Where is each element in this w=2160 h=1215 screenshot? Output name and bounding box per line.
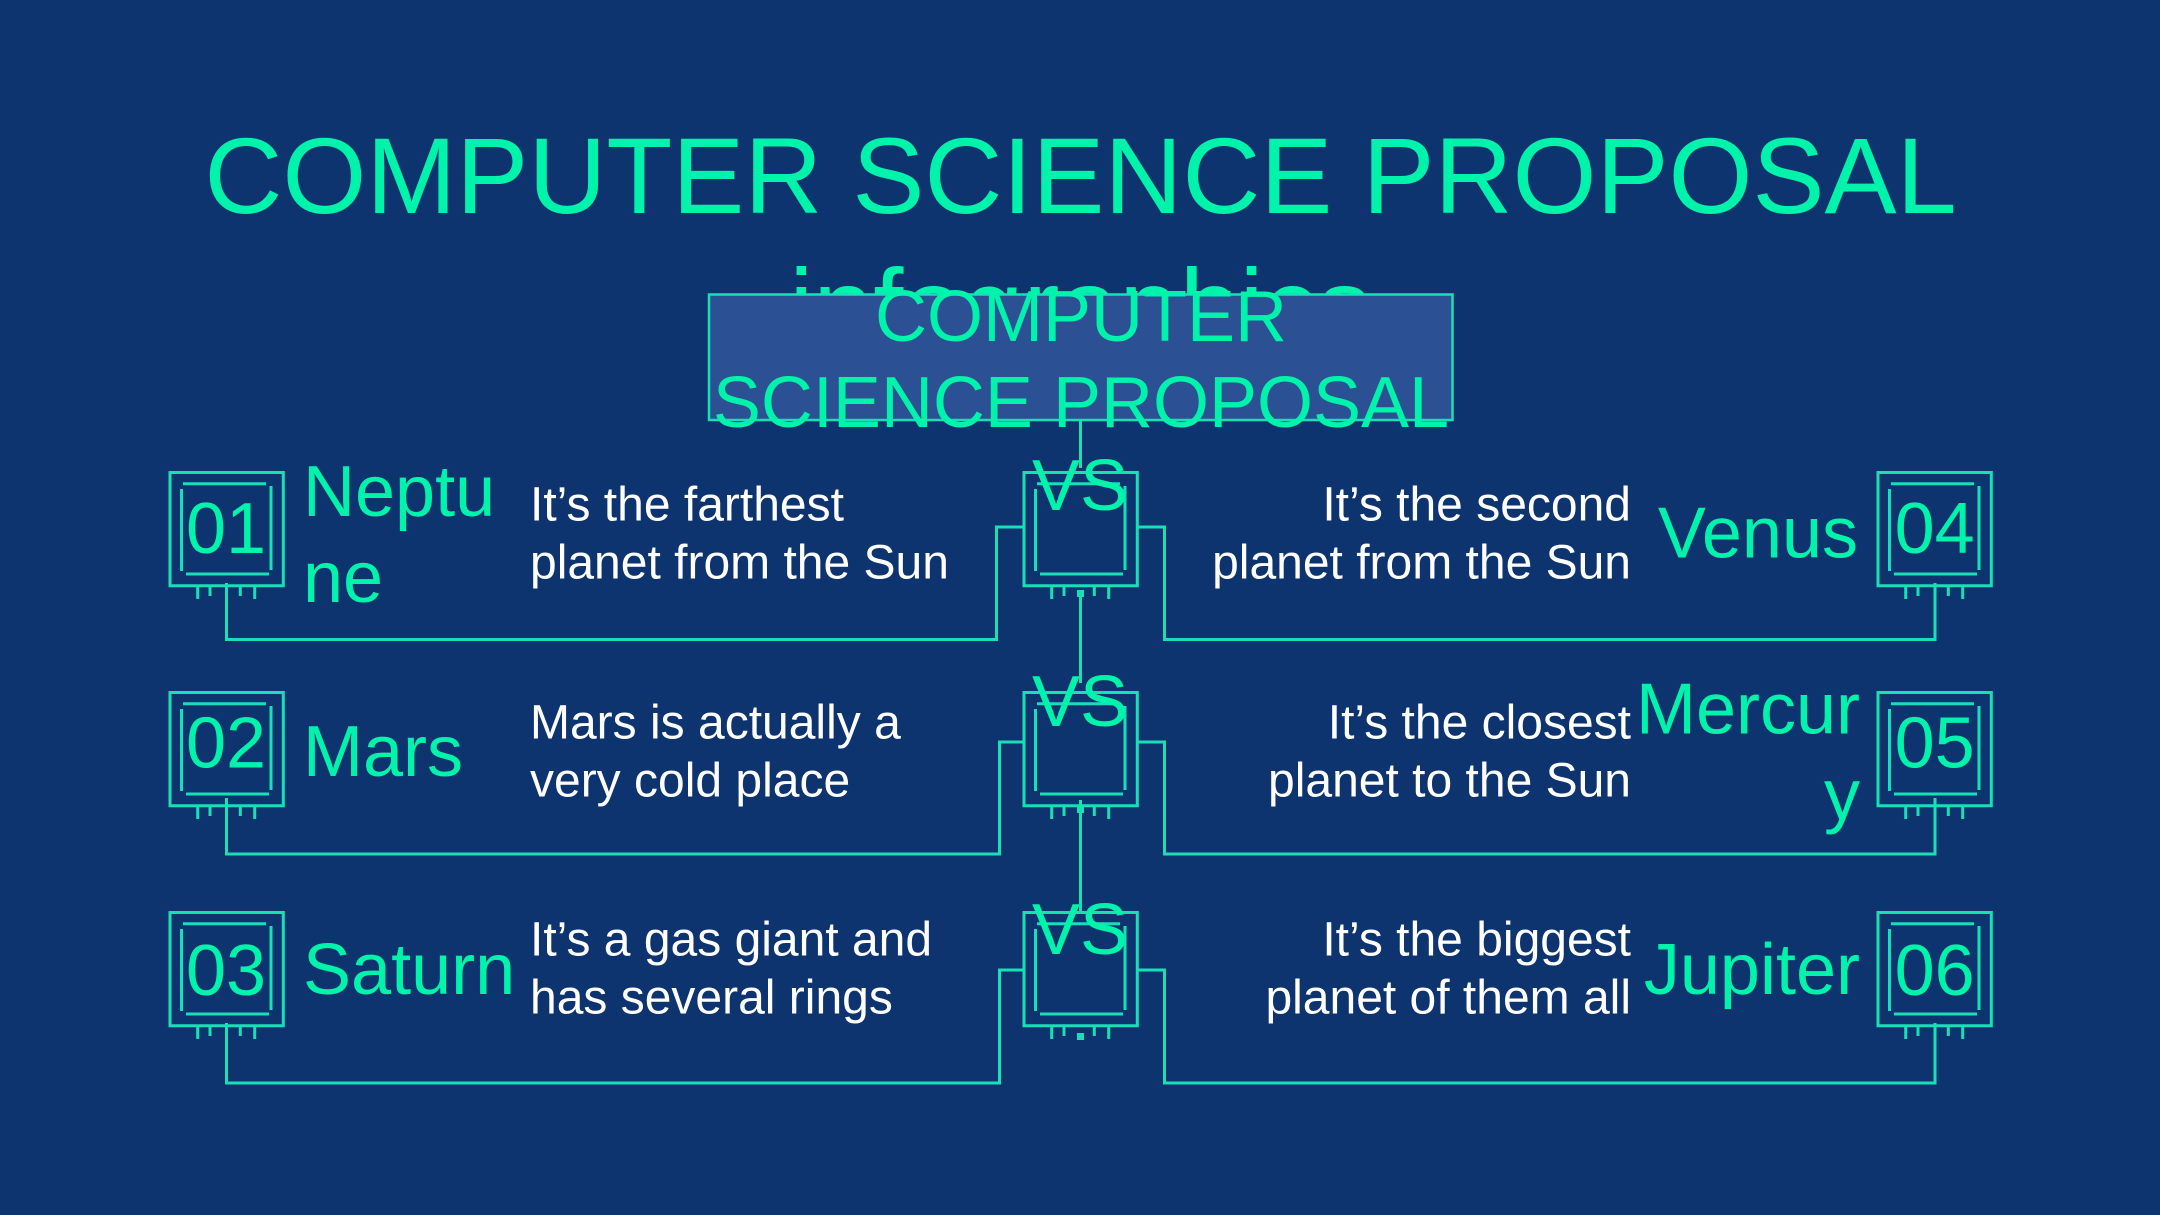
name Mercury: y: [1824, 756, 1860, 836]
Saturn description: It’s a gas giant and: [530, 914, 932, 966]
VS node 3: [1077, 1033, 1084, 1040]
row 3: Saturn vs Jupiter: [170, 890, 1991, 1083]
Mars description: Mars is actually a: [530, 696, 901, 750]
connector: second to third VS chip: [1079, 800, 1082, 912]
number 03: 03: [186, 931, 266, 1011]
connector 06 to VS: [1137, 970, 1935, 1083]
name Saturn: Saturn: [303, 930, 515, 1010]
chip 04: [1878, 472, 1991, 599]
VS node 2: [1077, 806, 1084, 813]
title: infographics: [789, 246, 1372, 367]
Jupiter description: planet of them all: [1265, 972, 1631, 1024]
connector 05 to VS: [1137, 742, 1935, 854]
VS chip 2: [1024, 692, 1137, 819]
VS chip 1: [1024, 472, 1137, 599]
connector: first to second VS chip: [1079, 597, 1082, 683]
VS label 2: VS: [1032, 662, 1128, 742]
Venus description: It’s the second: [1322, 478, 1631, 532]
name Venus: Venus: [1658, 494, 1858, 574]
connector 04 to VS: [1137, 527, 1935, 640]
VS chip 3: [1024, 912, 1137, 1039]
connector 02 to VS: [226, 742, 1024, 854]
number 05: 05: [1895, 704, 1975, 784]
chip 05: [1878, 692, 1991, 819]
chip 06: [1878, 912, 1991, 1039]
name Neptune: ne: [303, 538, 383, 618]
Venus description: planet from the Sun: [1212, 536, 1631, 590]
VS label 3: VS: [1032, 890, 1128, 970]
connector 01 to VS: [226, 527, 1024, 640]
name Mercury: Mercur: [1636, 670, 1860, 750]
row 2: Mars vs Mercury: [170, 662, 1991, 854]
VS node 1: [1077, 590, 1084, 597]
central topic box: COMPUTER: [875, 277, 1287, 357]
chip 03: [170, 912, 283, 1039]
connector: box to first VS chip: [1079, 420, 1082, 468]
chip 02: [170, 692, 283, 819]
Saturn description: has several rings: [530, 972, 893, 1024]
name Neptune: Neptu: [303, 452, 495, 532]
name Jupiter: Jupiter: [1644, 930, 1860, 1010]
VS label 1: VS: [1032, 446, 1128, 526]
Mercury description: planet to the Sun: [1268, 754, 1631, 808]
Mercury description: It’s the closest: [1328, 696, 1631, 750]
chip 01: [170, 472, 283, 599]
name Mars: Mars: [303, 712, 463, 792]
row 1: Neptune vs Venus: [170, 446, 1991, 640]
connector 03 to VS: [226, 970, 1024, 1083]
central topic box: SCIENCE PROPOSAL: [713, 363, 1449, 443]
Mars description: very cold place: [530, 754, 850, 808]
title: COMPUTER SCIENCE PROPOSAL: [204, 115, 1957, 236]
central topic box: [709, 277, 1452, 443]
Neptune description: It’s the farthest: [530, 478, 844, 532]
Neptune description: planet from the Sun: [530, 536, 949, 590]
number 06: 06: [1895, 931, 1975, 1011]
number 04: 04: [1895, 489, 1975, 569]
number 01: 01: [186, 489, 266, 569]
number 02: 02: [186, 704, 266, 784]
Jupiter description: It’s the biggest: [1322, 914, 1631, 966]
